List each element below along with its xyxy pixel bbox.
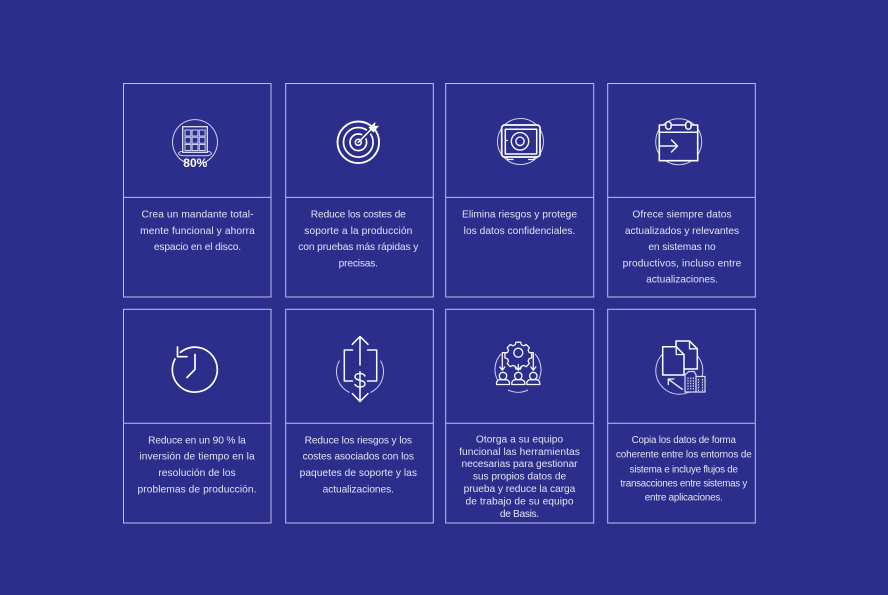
- text: costes de soporte: con pruebas más rápidas y: [298, 242, 419, 253]
- text: copia de datos: sistema e incluye flujos de: [630, 464, 738, 475]
- text: costes de soporte: precisas.: [339, 258, 378, 269]
- text: riesgos y costes: [300, 435, 417, 495]
- text: equipo funcional: Otorga a su equipo: [476, 434, 563, 445]
- text: equipo funcional: prueba y reduce la carga: [464, 484, 576, 495]
- panel: datos confidenciales: [446, 84, 594, 297]
- icon: window grid 80%: [172, 120, 218, 170]
- panel: riesgos y costes: [286, 309, 433, 523]
- text: copia de datos: Copia los datos de forma: [632, 435, 736, 446]
- text: inversión de tiempo: problemas de producción.: [138, 484, 256, 495]
- icon: gear, arrows and three people: [495, 342, 541, 392]
- text: equipo funcional: funcional las herramientas: [459, 447, 580, 458]
- text: costes de soporte: [298, 210, 419, 269]
- text: datos actualizados: actualizaciones.: [646, 275, 718, 286]
- text: datos confidenciales: Elimina riesgos y protege: [462, 210, 577, 220]
- panel: costes de soporte: [286, 84, 433, 297]
- icon: dollar with up and down arrows: [337, 336, 383, 402]
- text: riesgos y costes: paquetes de soporte y las: [300, 468, 417, 479]
- text: equipo funcional: de Basis.: [500, 509, 539, 520]
- text: datos actualizados: productivos, incluso entre: [623, 258, 742, 269]
- text: equipo funcional: necesarias para gestionar: [462, 459, 578, 470]
- text: copia de datos: coherente entre los entornos de: [616, 449, 752, 460]
- text: equipo funcional: de trabajo de su equipo: [466, 497, 574, 508]
- text: riesgos y costes: costes asociados con los: [303, 452, 414, 463]
- text: equipo funcional: [459, 434, 580, 520]
- text: inversión de tiempo: resolución de los: [158, 468, 236, 479]
- icon: documents, building and arrow: [656, 341, 705, 394]
- icon: window grid 80%: 80%: [183, 156, 208, 170]
- icon: clock with back arrow: [172, 347, 217, 392]
- text: copia de datos: entre aplicaciones.: [645, 493, 723, 504]
- text: costes de soporte: soporte a la producción: [304, 226, 412, 237]
- text: datos actualizados: Ofrece siempre datos: [632, 210, 732, 220]
- panel: datos actualizados: [608, 84, 755, 297]
- panel: equipo funcional: [446, 309, 594, 523]
- panel: copia de datos: [608, 309, 755, 523]
- text: mandante funcional: espacio en el disco.: [154, 242, 241, 253]
- text: copia de datos: [616, 435, 752, 504]
- text: inversión de tiempo: [138, 435, 256, 495]
- text: inversión de tiempo: inversión de tiempo en la: [139, 452, 255, 463]
- text: mandante funcional: mente funcional y ahorra: [140, 226, 255, 237]
- text: equipo funcional: sus propios datos de: [473, 472, 566, 483]
- text: datos actualizados: actualizados y relevantes: [625, 226, 739, 237]
- text: riesgos y costes: actualizaciones.: [323, 484, 394, 495]
- text: datos actualizados: en sistemas no: [648, 242, 716, 253]
- text: copia de datos: transacciones entre sistemas y: [620, 479, 747, 490]
- icon: calendar with arrow: [656, 119, 702, 165]
- text: mandante funcional: Crea un mandante total-: [142, 210, 254, 220]
- panel: inversión de tiempo: [124, 309, 271, 523]
- text: inversión de tiempo: Reduce en un 90 % la: [148, 435, 246, 446]
- text: riesgos y costes: Reduce los riesgos y los: [305, 435, 412, 446]
- text: datos actualizados: [623, 210, 742, 286]
- icon: target with arrow: [338, 122, 379, 163]
- panel: mandante funcional: [124, 84, 271, 297]
- icon: safe: [498, 118, 544, 164]
- text: datos confidenciales: los datos confidenciales.: [464, 226, 575, 237]
- text: mandante funcional: [140, 210, 255, 253]
- text: datos confidenciales: [462, 210, 577, 237]
- text: costes de soporte: Reduce los costes de: [311, 210, 406, 220]
